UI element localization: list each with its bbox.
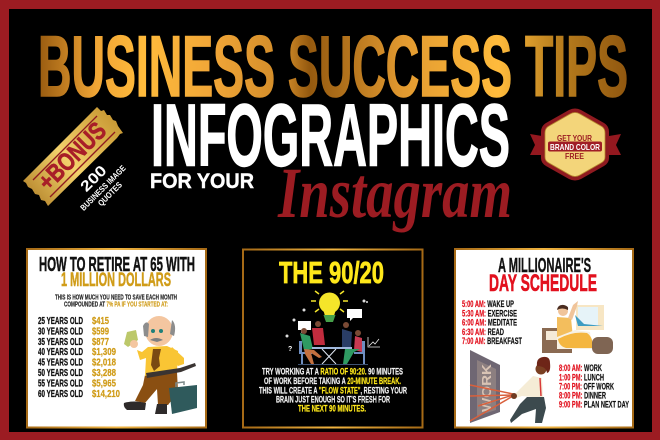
floor line bbox=[298, 364, 368, 366]
hands bbox=[511, 393, 517, 399]
right eye bbox=[159, 329, 163, 333]
person in red bbox=[312, 328, 325, 345]
age 45: 45 YEARS OLD bbox=[38, 357, 83, 369]
heads bbox=[301, 321, 361, 336]
ticket shape bbox=[23, 107, 123, 206]
head bbox=[145, 316, 173, 346]
torso bbox=[557, 317, 573, 338]
right arm bbox=[168, 347, 184, 366]
table bbox=[312, 347, 352, 349]
7:00: 7:00 AM: BREAKFAST bbox=[462, 336, 522, 347]
head left bbox=[301, 328, 307, 334]
hair bbox=[557, 305, 568, 310]
panel heading: THE 90/20 bbox=[279, 255, 384, 290]
briefcase bbox=[169, 385, 197, 414]
age 25: 25 YEARS OLD bbox=[38, 315, 83, 327]
shoes bbox=[124, 402, 167, 414]
green person legs bbox=[304, 349, 322, 364]
dot four bbox=[366, 301, 368, 303]
amount 50: $3,288 bbox=[92, 367, 116, 379]
8:00 pm: 8:00 PM: DINNER bbox=[559, 390, 606, 402]
amount 55: $5,965 bbox=[92, 378, 116, 390]
rays bbox=[311, 291, 348, 312]
person in pink bbox=[354, 336, 362, 352]
moustache bbox=[150, 338, 163, 342]
person in navy bbox=[342, 329, 352, 348]
subtitle: instagram script: Instagram bbox=[277, 153, 512, 233]
hexagon gold face bbox=[545, 112, 605, 176]
6:00: 6:00 AM: MEDITATE bbox=[462, 318, 517, 328]
hand bbox=[130, 340, 138, 348]
panel frame bbox=[455, 249, 633, 428]
amount 35: $877 bbox=[92, 336, 109, 348]
age labels bbox=[38, 315, 83, 400]
blanket yellow bbox=[558, 333, 592, 348]
panel frame bbox=[243, 250, 422, 428]
amount 45: $2,018 bbox=[92, 357, 116, 369]
illustration: waking in bed bbox=[542, 301, 613, 354]
age 55: 55 YEARS OLD bbox=[38, 378, 83, 390]
bonus ticket bbox=[23, 107, 128, 213]
dot three bbox=[362, 300, 366, 302]
headboard bbox=[542, 328, 572, 353]
bonus note bbox=[77, 162, 128, 213]
panel: retire at 65 bbox=[27, 249, 206, 428]
tie bbox=[151, 349, 161, 371]
hexagon bbox=[541, 108, 609, 180]
question mark: ? bbox=[288, 346, 292, 353]
lower legs bbox=[343, 349, 360, 364]
body line four: BRAIN JUST ENOUGH SO IT'S FRESH FOR bbox=[276, 394, 390, 406]
raised arm bbox=[568, 301, 578, 320]
intro line one: THIS IS HOW MUCH YOU NEED TO SAVE EACH MONTH bbox=[55, 294, 177, 302]
speech bubbles bbox=[298, 309, 362, 333]
dot one bbox=[292, 318, 296, 322]
evening schedule bbox=[559, 363, 629, 410]
tower face bbox=[477, 360, 496, 416]
bonus label: +BONUS bbox=[33, 117, 112, 196]
monthly amounts bbox=[92, 315, 120, 400]
work label: WORK bbox=[479, 363, 494, 412]
amount 30: $599 bbox=[92, 325, 109, 337]
hair bbox=[537, 357, 550, 373]
panel heading: HOW TO RETIRE AT 65 WITH bbox=[39, 254, 195, 276]
eyes bbox=[151, 329, 163, 333]
head third bbox=[343, 322, 349, 328]
window view bbox=[575, 315, 603, 326]
dot two bbox=[302, 308, 306, 312]
window wall bbox=[576, 305, 604, 330]
shirt bbox=[515, 376, 543, 398]
ropes bbox=[470, 385, 513, 421]
brand color: BRAND COLOR bbox=[550, 142, 600, 152]
age 60: 60 YEARS OLD bbox=[38, 388, 83, 400]
trousers bbox=[135, 372, 178, 405]
amount 40: $1,309 bbox=[92, 346, 116, 358]
blanket white bbox=[557, 330, 592, 349]
trousers bbox=[510, 397, 546, 423]
left bubble bbox=[298, 321, 311, 333]
business image: BUSINESS IMAGE bbox=[78, 163, 128, 213]
9:00 pm: 9:00 PM: PLAN NEXT DAY bbox=[559, 400, 629, 410]
panel frame bbox=[27, 249, 206, 428]
briefcase handle bbox=[176, 382, 184, 387]
age 30: 30 YEARS OLD bbox=[38, 325, 83, 337]
age 40: 40 YEARS OLD bbox=[38, 346, 83, 358]
7:00 pm: 7:00 PM: OFF WORK bbox=[559, 382, 614, 392]
head bbox=[558, 306, 568, 316]
6:30: 6:30 AM: READ bbox=[462, 327, 504, 338]
200: 200 bbox=[77, 162, 110, 195]
tower side bbox=[470, 350, 500, 423]
pillow bbox=[546, 331, 560, 340]
ticket stripes bbox=[33, 116, 115, 197]
head fourth bbox=[355, 330, 361, 336]
age 50: 50 YEARS OLD bbox=[38, 367, 83, 379]
bulb bbox=[319, 292, 340, 314]
5:30: 5:30 AM: EXERCISE bbox=[462, 308, 517, 320]
bulb neck bbox=[323, 309, 336, 316]
body line two: OF WORK BEFORE TAKING A 20-MINUTE BREAK. bbox=[264, 376, 401, 387]
8:00 am: 8:00 AM: WORK bbox=[559, 363, 602, 374]
growth chart bbox=[368, 337, 380, 347]
amount 60: $14,210 bbox=[92, 388, 120, 400]
hair bbox=[143, 320, 175, 337]
illustration: man pulling work tower bbox=[470, 350, 550, 423]
1:00 pm: 1:00 PM: LUNCH bbox=[559, 372, 604, 384]
panel: millionaire schedule bbox=[455, 249, 633, 428]
footboard bbox=[592, 337, 613, 354]
body line five: THE NEXT 90 MINUTES. bbox=[298, 404, 366, 414]
shirt bbox=[137, 346, 178, 376]
right bubble bbox=[347, 309, 362, 321]
head second bbox=[315, 321, 321, 327]
morning schedule bbox=[462, 299, 522, 347]
head bbox=[536, 364, 546, 374]
chairs bbox=[299, 341, 365, 364]
intro line two: COMPOUNDED AT 7% PA IF YOU STARTED AT: bbox=[64, 302, 168, 308]
money bbox=[124, 330, 138, 347]
body line one: TRY WORKING AT A RATIO OF 90:20. 90 MINUTES bbox=[262, 366, 403, 378]
subtitle: for your: FOR YOUR bbox=[150, 170, 254, 193]
table legs bbox=[322, 349, 336, 364]
body copy bbox=[259, 366, 407, 414]
dot five bbox=[286, 334, 288, 338]
brand color pill bbox=[548, 142, 602, 152]
panel: 90/20 bbox=[243, 250, 422, 428]
panel subheading: 1 MILLION DOLLARS bbox=[61, 270, 171, 291]
illustration: old man with briefcase bbox=[124, 316, 197, 414]
belt bbox=[146, 363, 196, 378]
body line three: THIS WILL CREATE A "FLOW STATE", RESTING YOUR bbox=[259, 386, 407, 396]
illustration: team under lightbulb bbox=[286, 291, 380, 364]
brand color badge bbox=[530, 108, 621, 180]
age 35: 35 YEARS OLD bbox=[38, 336, 83, 348]
bulb base bbox=[324, 315, 336, 322]
window bbox=[578, 307, 598, 326]
person in green bbox=[300, 333, 313, 350]
amount 25: $415 bbox=[92, 315, 109, 327]
red tie bbox=[540, 378, 541, 396]
ribbon bbox=[530, 134, 621, 155]
left eye bbox=[151, 329, 155, 333]
free: FREE bbox=[565, 152, 585, 161]
quotes: QUOTES bbox=[96, 180, 124, 208]
5:00: 5:00 AM: WAKE UP bbox=[462, 299, 514, 310]
get your: GET YOUR bbox=[557, 134, 592, 143]
